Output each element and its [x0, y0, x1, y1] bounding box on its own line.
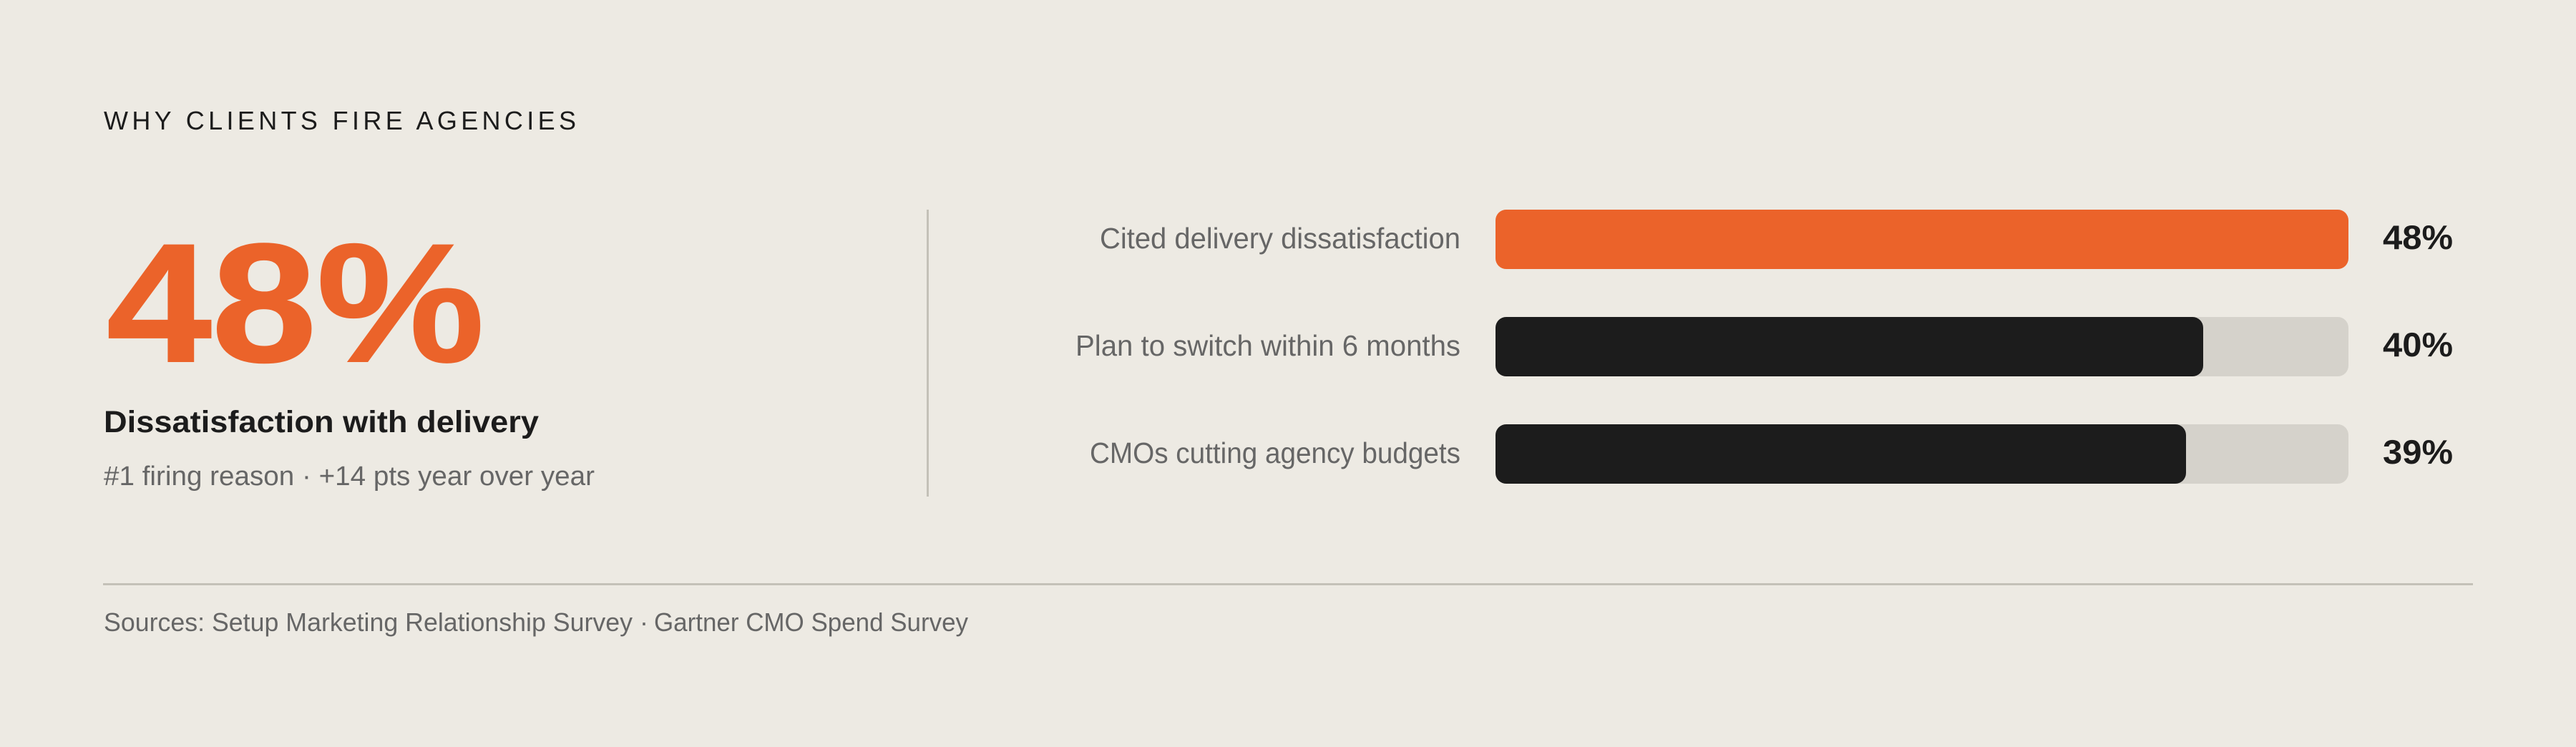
bar row: cited delivery dissatisfaction — [1100, 210, 2453, 269]
bar row: CMOs cutting budgets — [1090, 424, 2453, 484]
title: WHY CLIENTS FIRE AGENCIES — [104, 106, 576, 135]
bar row: plan to switch: Plan to switch within 6 months — [1075, 329, 1460, 362]
bar row: CMOs cutting budgets: 39% — [2383, 433, 2453, 471]
sources footnote — [104, 607, 968, 637]
sources footnote: Gartner CMO Spend Survey — [654, 607, 968, 637]
stat heading: Dissatisfaction with delivery — [104, 405, 539, 439]
panel: headline statistic — [104, 209, 595, 492]
bar row: cited delivery dissatisfaction: Cited delivery dissatisfaction — [1100, 222, 1460, 255]
bar row: CMOs cutting budgets: CMOs cutting agency budgets — [1090, 436, 1460, 469]
stat description: #1 firing reason · +14 pts year over year — [104, 462, 595, 492]
bar row: cited delivery dissatisfaction: 48% — [2383, 218, 2453, 256]
panel: bar chart — [1075, 210, 2453, 484]
bar row: plan to switch: 40% — [2383, 326, 2453, 363]
sources footnote: · — [640, 607, 648, 637]
big number: 48% — [107, 209, 484, 398]
bar row: plan to switch — [1075, 317, 2453, 376]
sources footnote: Sources: Setup Marketing Relationship Survey — [104, 607, 633, 637]
